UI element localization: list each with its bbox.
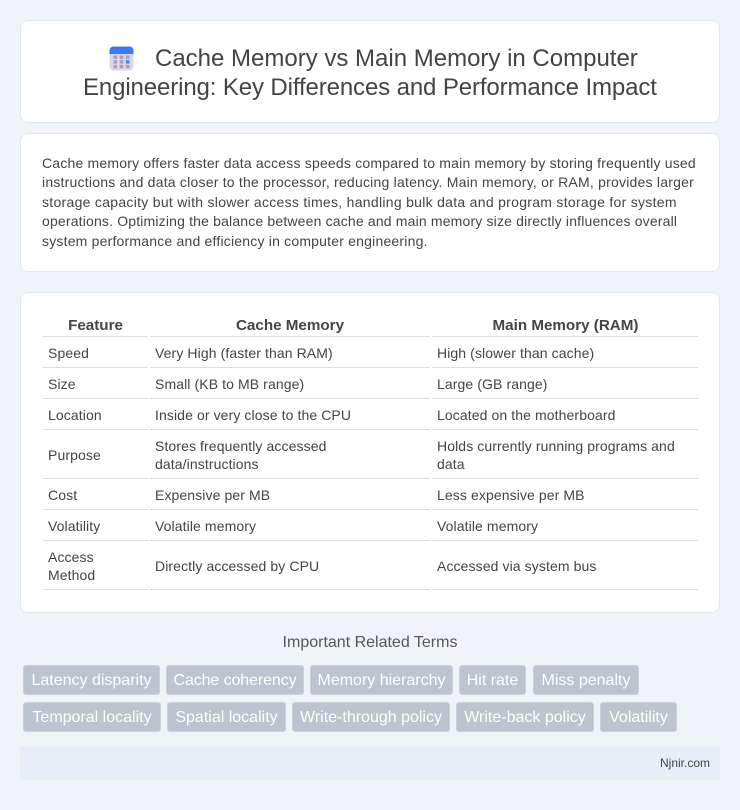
tag: latency disparity: Latency disparity (31, 672, 152, 689)
row: cost: Less expensive per MB (437, 487, 585, 503)
row: speed: Speed (48, 345, 89, 361)
row: size: Size (48, 376, 76, 392)
tag: write-back policy: Write-back policy (464, 709, 586, 726)
row: speed: High (slower than cache) (437, 345, 594, 361)
table header row: Main Memory (RAM) (492, 317, 638, 334)
row: size: Large (GB range) (437, 376, 548, 392)
row: purpose: data/instructions (155, 456, 259, 472)
tags: related terms (23, 665, 677, 732)
text block: introduction: storage capacity but with slower access times, handling bulk data and program storage for system (42, 194, 677, 210)
tag: write-through policy (292, 702, 450, 732)
row: speed: Very High (faster than RAM) (155, 345, 333, 361)
row: access method (48, 549, 596, 583)
title (83, 45, 657, 101)
row: location (48, 407, 616, 423)
row: size: Small (KB to MB range) (155, 376, 304, 392)
footer (20, 746, 720, 780)
footer credit: Njnir.com (660, 756, 710, 770)
row: volatility: Volatile memory (437, 518, 538, 534)
tag: miss penalty: Miss penalty (542, 672, 630, 689)
text block: introduction: system performance and efficiency in computer engineering. (42, 233, 428, 249)
row: size (48, 376, 548, 392)
row: purpose: Purpose (48, 447, 101, 463)
row: access method: Directly accessed by CPU (155, 558, 319, 574)
text block: introduction: operations. Optimizing the balance between cache and main memory size directly influences overall (42, 213, 677, 229)
panel: introduction (20, 133, 720, 272)
panel: title header (20, 20, 720, 123)
text block: introduction (42, 155, 696, 249)
tag: miss penalty (533, 665, 639, 695)
tag: temporal locality (23, 702, 161, 732)
row: purpose: Stores frequently accessed (155, 438, 326, 454)
tag: hit rate: Hit rate (467, 672, 518, 689)
tag: hit rate (459, 665, 526, 695)
row: volatility: Volatility (48, 518, 100, 534)
table header row (68, 317, 638, 334)
tag: temporal locality: Temporal locality (32, 709, 152, 726)
row: purpose: Holds currently running programs and (437, 438, 675, 454)
row: volatility: Volatile memory (155, 518, 256, 534)
row: speed (48, 345, 594, 361)
icon: calendar grid (110, 46, 134, 70)
text block: introduction: Cache memory offers faster data access speeds compared to main memory by storing frequently used (42, 155, 696, 171)
tag: volatility: Volatility (609, 709, 668, 726)
title: Engineering: Key Differences and Performance Impact (83, 74, 657, 101)
tag: memory hierarchy: Memory hierarchy (317, 672, 446, 689)
row: access method: Accessed via system bus (437, 558, 596, 574)
tag: volatility (600, 702, 677, 732)
tag: latency disparity (23, 665, 160, 695)
row: access method: Access (48, 549, 94, 565)
tag: spatial locality (167, 702, 286, 732)
tag: cache coherency: Cache coherency (173, 672, 297, 689)
tag: memory hierarchy (310, 665, 453, 695)
title: Cache Memory vs Main Memory in Computer (155, 45, 638, 72)
row: location: Location (48, 407, 102, 423)
row: access method: Method (48, 567, 95, 583)
heading: important related terms: Important Related Terms (283, 634, 457, 651)
row: purpose: data (437, 456, 465, 472)
panel: comparison table (20, 292, 720, 613)
row: volatility (48, 518, 538, 534)
table header row: Feature (68, 317, 123, 334)
row: location: Located on the motherboard (437, 407, 616, 423)
table header row: Cache Memory (236, 317, 344, 334)
tag: write-through policy: Write-through policy (300, 709, 442, 726)
row: cost (48, 487, 585, 503)
text block: introduction: instructions and data closer to the processor, reducing latency. Main memory, or RAM, provides larger (42, 174, 694, 190)
tag: spatial locality: Spatial locality (175, 709, 278, 726)
row: cost: Expensive per MB (155, 487, 270, 503)
row: purpose (48, 438, 675, 472)
row: cost: Cost (48, 487, 77, 503)
tag: write-back policy (456, 702, 594, 732)
row: location: Inside or very close to the CPU (155, 407, 351, 423)
tag: cache coherency (166, 665, 304, 695)
